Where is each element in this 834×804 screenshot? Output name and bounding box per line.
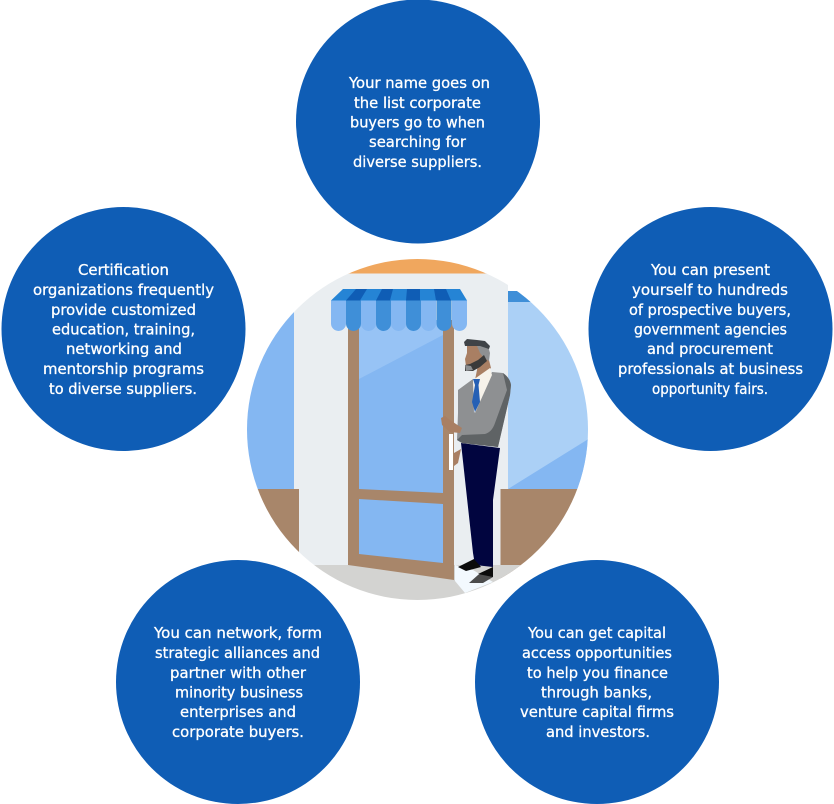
text: bottom left circle <box>153 624 322 741</box>
left window <box>247 312 294 490</box>
text: bottom right circle <box>520 624 674 741</box>
text: left circle: to diverse suppliers. <box>49 380 197 398</box>
text: left circle: provide customized <box>51 301 196 319</box>
text: bottom right circle: and investors. <box>546 723 650 741</box>
central illustration: shop owner at door <box>240 255 600 610</box>
lower hand <box>454 449 461 466</box>
text: right circle: government agencies <box>634 320 787 338</box>
text: bottom left circle: strategic alliances and <box>155 644 320 662</box>
text: bottom left circle: corporate buyers. <box>172 723 304 741</box>
awning <box>331 289 467 331</box>
text: right circle: and procurement <box>647 340 773 358</box>
jacket body <box>457 372 511 447</box>
text: bottom right circle: to help you finance <box>527 664 668 682</box>
floor <box>314 565 520 600</box>
right brick base <box>500 489 578 578</box>
hand on door <box>441 416 462 433</box>
text: right circle: of prospective buyers, <box>629 301 791 319</box>
text: bottom left circle: You can network, form <box>153 624 322 642</box>
shadow sleeve <box>457 373 511 447</box>
text: top circle: diverse suppliers. <box>353 153 482 171</box>
text: top circle <box>348 74 490 171</box>
tie <box>472 379 480 412</box>
circle: bottom right <box>475 560 719 804</box>
text: left circle: mentorship programs <box>43 360 204 378</box>
door <box>348 320 454 580</box>
grey chin <box>465 365 473 371</box>
circle: top <box>296 0 540 244</box>
text: right circle: yourself to hundreds <box>632 281 788 299</box>
text: right circle <box>618 261 803 398</box>
text: right circle: professionals at business <box>618 360 803 378</box>
text: left circle: Certification <box>78 261 169 279</box>
text: left circle <box>33 261 214 398</box>
text: top circle: the list corporate <box>354 94 481 112</box>
text: bottom right circle: venture capital firms <box>520 703 674 721</box>
shop wall <box>294 274 508 566</box>
text: top circle: searching for <box>369 133 467 151</box>
door handle <box>449 434 453 470</box>
orange roof <box>348 259 488 274</box>
neck <box>475 359 491 378</box>
trousers <box>461 443 500 567</box>
text: left circle: education, training, <box>52 320 195 338</box>
circle: bottom left <box>116 560 360 804</box>
text: bottom left circle: minority business <box>175 684 303 702</box>
light on floor <box>455 565 493 593</box>
text: bottom right circle: You can get capital <box>527 624 666 642</box>
grey hair side <box>477 346 490 361</box>
shoes <box>458 559 481 571</box>
text: right circle: You can present <box>650 261 770 279</box>
text: top circle: Your name goes on <box>348 74 490 92</box>
shirt <box>473 368 492 413</box>
circle: left <box>2 207 246 451</box>
text: bottom right circle: through banks, <box>541 684 652 702</box>
text: top circle: buyers go to when <box>350 114 485 132</box>
text: bottom left circle: enterprises and <box>180 703 296 721</box>
beard <box>465 355 487 371</box>
man in suit <box>441 339 511 583</box>
text: right circle: opportunity fairs. <box>652 380 768 398</box>
left brick base <box>258 489 299 552</box>
dark hair <box>464 339 490 349</box>
right window <box>508 291 588 489</box>
circle: right <box>588 207 832 451</box>
text: left circle: organizations frequently <box>33 281 214 299</box>
text: bottom right circle: access opportunities <box>522 644 672 662</box>
text: left circle: networking and <box>66 340 182 358</box>
face <box>465 346 482 365</box>
text: bottom left circle: partner with other <box>170 664 307 682</box>
